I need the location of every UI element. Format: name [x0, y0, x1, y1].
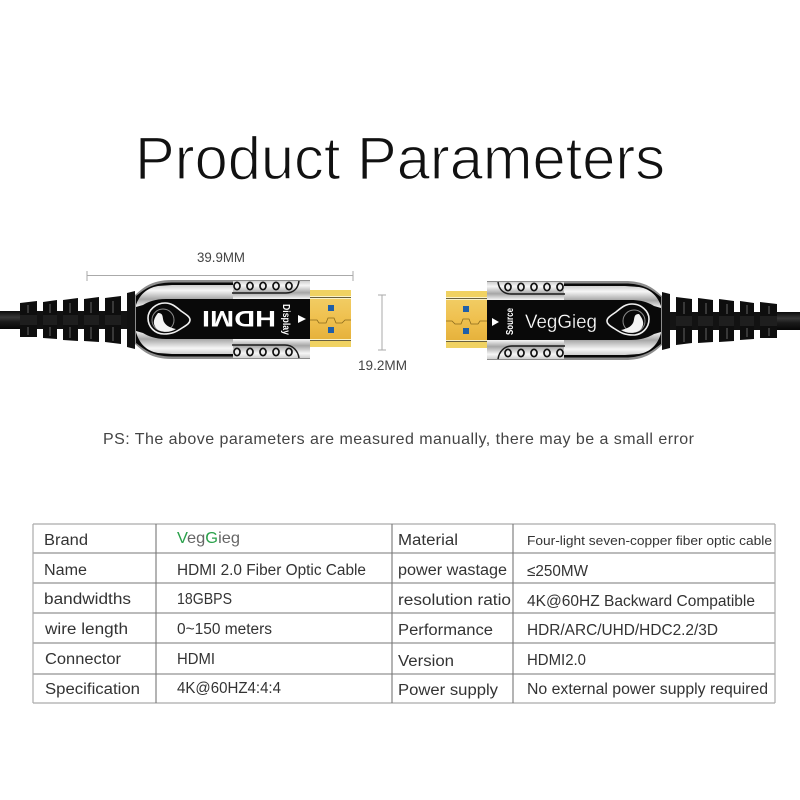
row: material [398, 532, 772, 549]
dimension: connector length 39.9MM: 39.9MM [197, 249, 245, 265]
row: version [398, 652, 586, 670]
row: bandwidths: 18GBPS [177, 591, 232, 608]
dimension: connector length 39.9MM [87, 249, 353, 281]
row: specification [45, 680, 281, 698]
row: resolution ratio: 4K@60HZ Backward Compatible [527, 593, 755, 610]
left cable connector with HDMI branding: HDMI [202, 306, 276, 331]
measurement note: PS: The above parameters are measured manually, there may be a small error [103, 431, 695, 448]
row: resolution ratio [398, 592, 755, 610]
right cable connector with VegGieg branding [446, 281, 800, 360]
right cable connector with VegGieg branding: Source [505, 308, 516, 335]
row: power supply: Power supply [398, 682, 498, 699]
row: specification: 4K@60HZ4:4:4 [177, 680, 281, 697]
row: power wastage: ≤250MW [527, 563, 588, 580]
row: wire length [44, 621, 272, 638]
row: connector [45, 651, 215, 668]
left cable connector with HDMI branding [0, 280, 351, 359]
row: version: HDMI2.0 [527, 652, 586, 669]
row: name: HDMI 2.0 Fiber Optic Cable [177, 562, 366, 579]
row: specification: Specification [45, 681, 140, 698]
row: brand: Brand [44, 532, 88, 549]
row: power supply [398, 681, 768, 699]
row: wire length: wire length [44, 621, 128, 638]
row: connector: HDMI [177, 651, 215, 668]
row: brand: VegGieg [177, 530, 240, 547]
row: wire length: 0~150 meters [177, 621, 272, 638]
title: Product Parameters [135, 125, 665, 192]
row: name: Name [44, 562, 87, 579]
row: performance [398, 622, 718, 639]
row: power wastage: power wastage [398, 562, 507, 579]
row: power wastage [398, 562, 588, 580]
dimension: connector height 19.2MM [358, 295, 407, 373]
row: material: Four-light seven-copper fiber optic cable [527, 533, 772, 548]
row: bandwidths [44, 591, 232, 608]
row: power supply: No external power supply required [527, 681, 768, 698]
row: performance: Performance [398, 622, 493, 639]
row: bandwidths: bandwidths [44, 591, 131, 608]
dimension: connector height 19.2MM: 19.2MM [358, 357, 407, 373]
row: resolution ratio: resolution ratio [398, 592, 511, 609]
row: name [44, 562, 366, 579]
row: performance: HDR/ARC/UHD/HDC2.2/3D [527, 622, 718, 639]
row: material: Material [398, 532, 458, 549]
left cable connector with HDMI branding: Display [280, 304, 291, 335]
specification table [33, 524, 775, 703]
right cable connector with VegGieg branding: VegGieg [525, 312, 597, 333]
row: version: Version [398, 653, 454, 670]
row: connector: Connector [45, 651, 121, 668]
row: brand [44, 530, 240, 549]
